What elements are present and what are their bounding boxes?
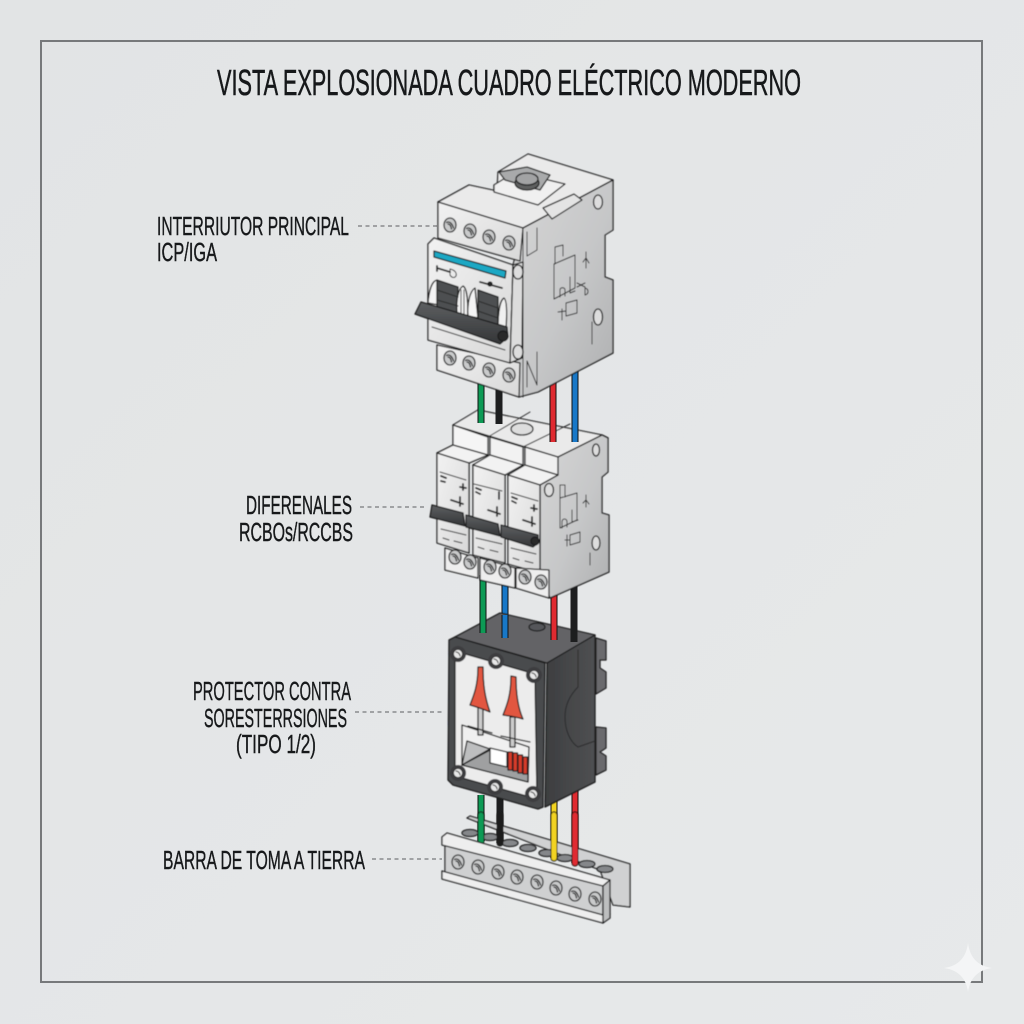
terminals and screws xyxy=(445,548,549,598)
module front 1 xyxy=(437,453,469,553)
top lip xyxy=(442,833,610,886)
red arrow right xyxy=(503,676,523,719)
wire ends on protector top xyxy=(483,615,574,642)
label: barra de toma a tierra: BARRA DE TOMA A TIERRA xyxy=(163,847,365,875)
schematic on side xyxy=(560,485,590,565)
label: protector contra sobretensiones xyxy=(193,678,443,759)
back rail xyxy=(467,816,630,907)
front screws xyxy=(452,855,601,906)
front symbols xyxy=(437,266,502,288)
white block xyxy=(490,748,507,767)
wires: differentials to protector xyxy=(483,575,574,642)
holes xyxy=(544,444,600,550)
breaker top terminal screws xyxy=(444,218,515,250)
box top xyxy=(455,613,595,663)
label: protector contra sobretensiones: PROTECTOR CONTRA xyxy=(193,678,351,706)
corner screws xyxy=(450,646,542,802)
label: interruptor principal xyxy=(157,213,437,267)
label: protector contra sobretensiones: SORESTERRSIONES xyxy=(204,705,347,733)
box front xyxy=(448,637,545,809)
label: diferenciales: RCBOs/RCCBS xyxy=(239,519,353,547)
breaker front panel xyxy=(428,238,513,363)
wire tops on differentials xyxy=(481,400,575,442)
wires: protector to ground bar (back part) xyxy=(481,785,575,863)
breaker top terminal block xyxy=(438,202,523,261)
white window xyxy=(455,651,537,799)
front symbols xyxy=(440,472,538,563)
wiring schematic on side xyxy=(554,245,589,320)
label: protector contra sobretensiones: (TIPO 1/2) xyxy=(236,731,316,759)
main breaker xyxy=(415,154,613,397)
top surface xyxy=(453,410,608,457)
label: interruptor principal: INTERRIUTOR PRINCIPAL xyxy=(157,213,349,241)
side mounting lugs xyxy=(596,638,606,775)
watermark star xyxy=(944,943,992,992)
linking bar xyxy=(430,505,539,547)
toggle bar xyxy=(415,302,508,344)
box side xyxy=(545,635,595,807)
inner pocket xyxy=(462,725,529,782)
toggle switches xyxy=(428,280,507,330)
ground bar xyxy=(442,815,630,923)
top screws xyxy=(462,830,613,872)
end face xyxy=(603,880,610,923)
label: diferenciales: DIFERENALES xyxy=(246,492,352,520)
knob xyxy=(515,173,539,190)
bottom lip xyxy=(442,871,610,923)
breaker bottom terminal screws xyxy=(444,351,515,382)
top slot xyxy=(543,194,582,219)
blue indicator strip xyxy=(434,251,506,278)
wires: breaker to differentials xyxy=(481,370,575,442)
module front 2 xyxy=(473,465,505,563)
breaker top knob plate xyxy=(494,172,565,205)
label: interruptor principal: ICP/IGA xyxy=(157,239,217,267)
module icons xyxy=(441,476,537,526)
red arrow left xyxy=(470,667,490,712)
wire ends at bar xyxy=(481,815,575,863)
breaker top surface xyxy=(438,154,613,228)
breaker side face xyxy=(511,180,613,397)
step surfaces xyxy=(437,445,488,463)
differential modules xyxy=(430,410,609,598)
breaker bottom terminal block xyxy=(437,345,520,397)
module front 3 xyxy=(508,475,540,573)
bar web xyxy=(445,845,603,915)
holes on breaker xyxy=(513,195,602,359)
top screw xyxy=(511,423,533,435)
red bars xyxy=(508,752,528,774)
label: diferenciales xyxy=(239,492,425,547)
arrow stems xyxy=(468,707,530,747)
upper tier xyxy=(453,425,558,475)
surge protector xyxy=(448,613,606,809)
top oval xyxy=(529,623,545,631)
side face xyxy=(540,435,609,598)
